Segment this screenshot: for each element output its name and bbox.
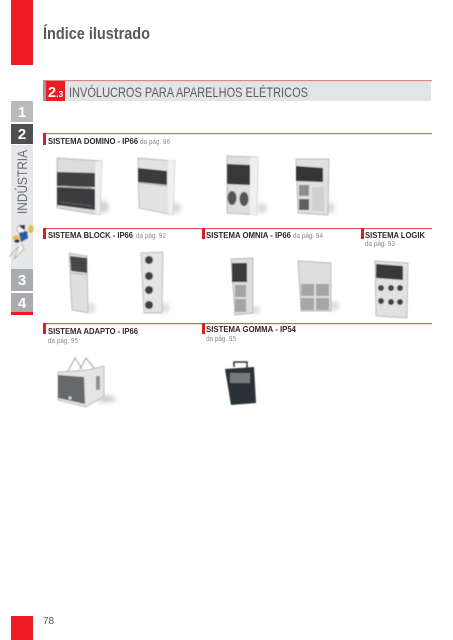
heading: sistema block: da pág. 92 [136,233,166,240]
heading: sistema omnia: da pág. 94 [293,233,323,240]
heading: sistema adapto: SISTEMA ADAPTO - IP66 [48,327,138,336]
red bottom tab [11,616,33,640]
icon: mascot [9,225,34,259]
heading: sistema block: SISTEMA BLOCK - IP66 [48,231,133,240]
tab 1 [11,101,33,122]
tab 4: 4 [18,295,27,312]
product: logik [375,261,408,318]
product: block sockets [141,252,169,313]
heading: sistema logik: da pág. 93 [365,241,395,248]
heading: sistema omnia [202,228,323,240]
heading: sistema domino: da pág. 86 [140,139,170,146]
heading: sistema gomma [202,323,296,343]
heading: sistema block [43,228,432,240]
product: block tall window [69,253,95,313]
tab 2 [11,124,33,144]
heading: sistema gomma: SISTEMA GOMMA - IP54 [206,325,296,334]
red marker [11,312,33,315]
sidebar navigation [9,101,34,315]
heading: sistema adapto [43,323,432,345]
tab 4 [11,293,33,312]
heading: sistema gomma: da pág. 95 [206,336,236,343]
section number: 2.3 [48,85,63,101]
red top tab [11,0,33,65]
heading: sistema logik [361,228,425,248]
tab 3: 3 [18,272,26,289]
product: omnia wide [298,261,339,311]
heading: sistema logik: SISTEMA LOGIK [365,231,425,240]
tab 2: 2 [18,126,26,143]
product: gomma [225,362,256,405]
heading: sistema domino [43,133,432,146]
page number: 78 [43,615,54,627]
product: domino single [138,158,181,215]
title: Índice ilustrado [43,24,150,43]
heading: sistema adapto: da pág. 95 [48,338,78,345]
product: domino sockets [227,156,267,215]
heading: sistema omnia: SISTEMA OMNIA - IP66 [206,231,291,240]
industry panel [11,145,33,269]
product: domino mixed [296,159,335,215]
product: adapto [58,358,116,407]
section header band [43,80,432,101]
heading: sistema domino: SISTEMA DOMINO - IP66 [48,137,138,146]
tab 3 [11,269,33,291]
section number [46,81,65,101]
vertical label: INDÚSTRIA [14,149,30,214]
section heading: INVÓLUCROS PARA APARELHOS ELÉTRICOS [69,84,308,100]
product: domino double [57,158,109,215]
product: omnia column [231,258,260,315]
tab 1: 1 [18,104,26,121]
